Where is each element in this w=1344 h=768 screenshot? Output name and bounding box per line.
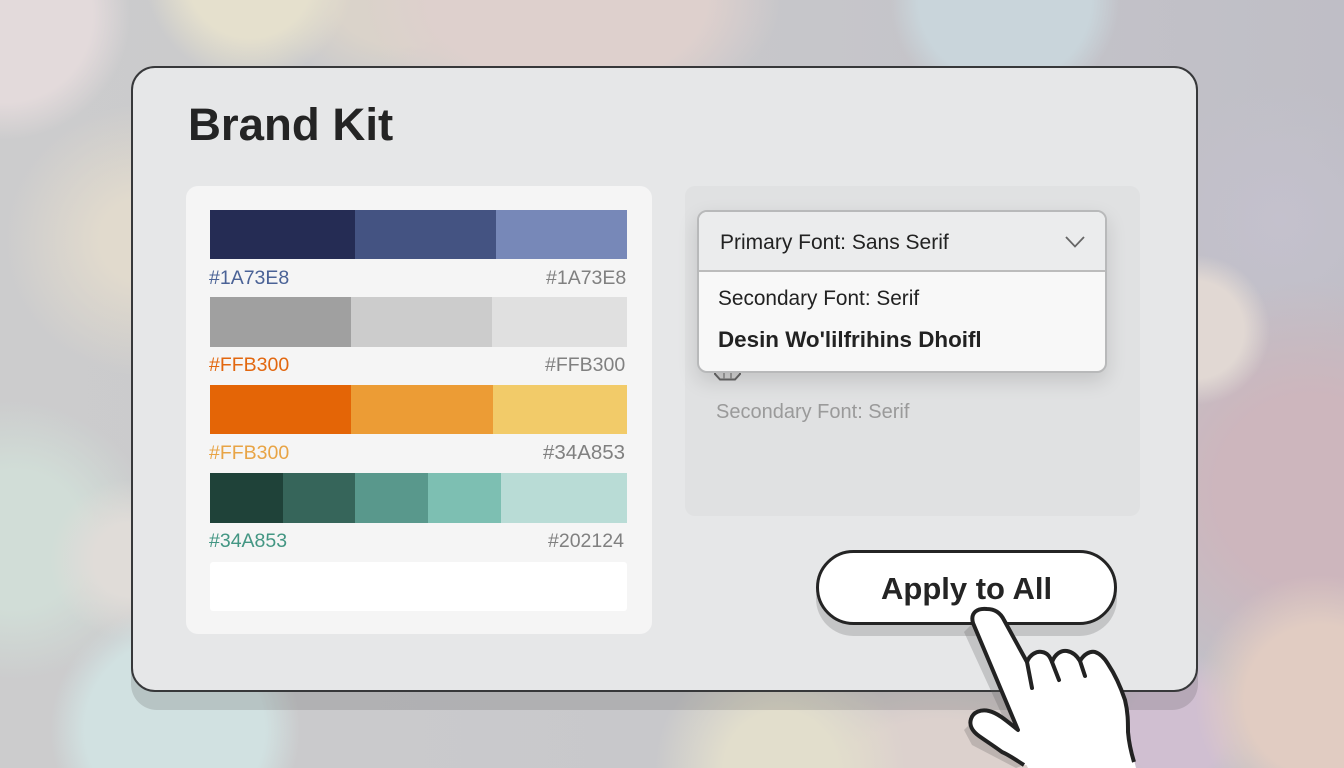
white swatch <box>210 562 627 611</box>
finger separators <box>1027 661 1085 688</box>
hex label left: orange: #FFB300 <box>209 354 289 376</box>
panel: colour palettes <box>186 186 652 634</box>
hex label left: green: #34A853 <box>209 530 287 552</box>
main card: Brand Kit <box>131 66 1198 692</box>
dropdown header <box>699 212 1105 272</box>
hex label right: green row: #202124 <box>548 530 624 552</box>
title: Brand Kit <box>188 99 393 150</box>
hex label right: grey row: #FFB300 <box>545 354 625 376</box>
hand bottom fill <box>1024 760 1136 768</box>
hand shadow <box>964 623 1024 768</box>
icon: chevron <box>1065 236 1085 248</box>
swatch row: navy blues <box>210 210 627 259</box>
card drop shadow <box>131 84 1198 710</box>
hand outline <box>970 609 1134 765</box>
secondary font option: Secondary Font: Serif <box>718 287 919 310</box>
hex label left: amber: #FFB300 <box>209 442 289 464</box>
garbled bold option: Desin Wo'lilfrihins Dhoifl <box>718 327 982 352</box>
partly hidden icon <box>714 373 741 380</box>
hex label right: blue row: #1A73E8 <box>546 267 626 289</box>
swatch row: greys <box>210 297 627 347</box>
apply button <box>816 550 1117 625</box>
button label: Apply to All <box>881 571 1052 606</box>
secondary font label: Secondary Font: Serif <box>716 401 909 423</box>
button shadow <box>816 561 1117 636</box>
swatch row: greens <box>210 473 627 523</box>
hex label left: blue: #1A73E8 <box>209 267 289 289</box>
hex label right: orange row: #34A853 <box>543 441 625 464</box>
primary font label: Primary Font: Sans Serif <box>720 231 949 254</box>
font dropdown <box>697 210 1107 373</box>
panel: typography <box>685 186 1140 516</box>
swatch row: oranges <box>210 385 627 434</box>
